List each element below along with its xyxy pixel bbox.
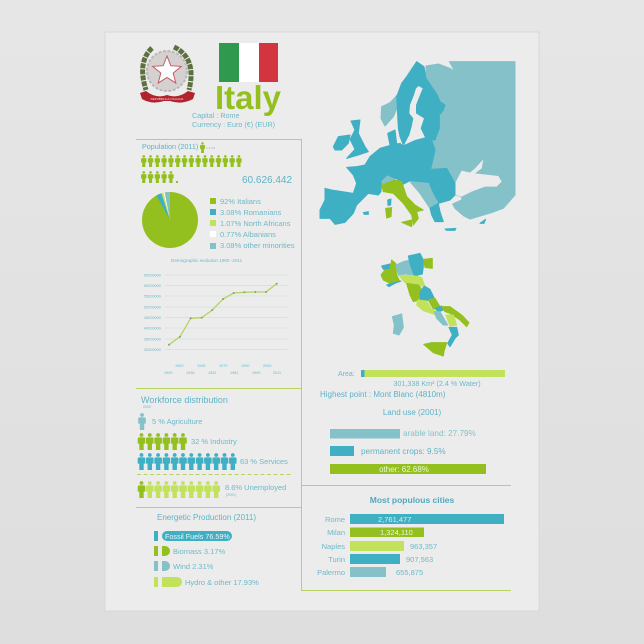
icon: Italian flag bbox=[219, 43, 278, 82]
icon: coat of arms bbox=[140, 47, 195, 103]
Sweden, Finland and Baltic states bbox=[397, 62, 445, 145]
Greece bbox=[430, 203, 443, 222]
area bar bbox=[361, 370, 505, 377]
line chart: demographic evolution: 2000 bbox=[263, 364, 271, 368]
line chart: demographic evolution: 1990 bbox=[252, 371, 260, 375]
Lombardy bbox=[396, 260, 414, 275]
Calabria bbox=[448, 327, 458, 347]
city: Rome: Rome bbox=[325, 515, 345, 524]
cities heading: Most populous cities bbox=[370, 495, 455, 505]
line chart: demographic evolution: 55000000 bbox=[144, 294, 161, 298]
population heading: Population (2011) bbox=[142, 142, 198, 151]
icon: coat of arms: REPUBBLICA ITALIANA bbox=[151, 97, 183, 101]
Switzerland bbox=[382, 176, 395, 185]
Umbria and Marche bbox=[420, 286, 434, 301]
line chart: demographic evolution: 50000000 bbox=[144, 306, 161, 310]
line chart: demographic evolution bbox=[144, 258, 287, 375]
city: Palermo: Palermo bbox=[317, 568, 345, 577]
line chart: demographic evolution: 1936 bbox=[186, 371, 194, 375]
Basilicata bbox=[446, 315, 457, 326]
panel frame lines bbox=[136, 140, 511, 590]
line chart: demographic evolution: 60000000 bbox=[144, 284, 161, 288]
Aosta bbox=[382, 264, 390, 269]
energy heading: Energetic Production (2011) bbox=[157, 513, 256, 522]
Norway bbox=[381, 95, 398, 126]
pie legend: 3.08% Romanians bbox=[220, 208, 282, 217]
population legend icon: = 3 mil bbox=[206, 146, 215, 150]
Russia and eastern neighbours bbox=[432, 62, 515, 219]
line chart: demographic evolution: 1900 bbox=[164, 371, 172, 375]
industry row bbox=[138, 433, 237, 450]
capital and currency: Currency : Euro (€) (EUR) bbox=[192, 120, 275, 129]
pie legend: 92% Italians bbox=[220, 197, 261, 206]
pie legend: 1.07% North Africans bbox=[220, 219, 291, 228]
panel: population bbox=[141, 142, 295, 375]
Tuscany bbox=[407, 283, 421, 302]
pie legend: 3.08% other minorities bbox=[220, 241, 295, 250]
city: Rome: 2,761,477 bbox=[378, 515, 411, 524]
line chart: demographic evolution: Demographic evolution 1900 -2011 bbox=[171, 258, 243, 263]
Ireland bbox=[333, 135, 350, 150]
northern pale area bbox=[426, 64, 455, 107]
city: Milan: 1,324,110 bbox=[380, 528, 413, 537]
wind bar: Wind 2.31% bbox=[173, 562, 214, 571]
biomass bar: Biomass 3.17% bbox=[173, 547, 225, 556]
Sardinia bbox=[392, 314, 403, 335]
area value: 301,338 Km² (2.4 % Water) bbox=[393, 379, 481, 388]
Sardinia bbox=[386, 208, 392, 218]
services row bbox=[138, 453, 288, 470]
population total: 60.626.442 bbox=[242, 175, 292, 186]
land use: other bbox=[330, 464, 486, 474]
land use: permanent crops: permanent crops: 9.5% bbox=[361, 447, 446, 456]
line chart: demographic evolution: 1951 bbox=[208, 371, 216, 375]
city: Milan bbox=[327, 528, 424, 537]
map: Italian regions bbox=[381, 253, 469, 356]
fossil fuels bar: Fossil Fuels 76.59% bbox=[165, 532, 230, 541]
line chart: demographic evolution: 30000000 bbox=[144, 348, 161, 352]
Abruzzo bbox=[428, 298, 440, 309]
land use: permanent crops bbox=[330, 446, 446, 456]
Great Britain bbox=[347, 120, 368, 158]
Campania bbox=[434, 312, 448, 325]
city: Milan: Milan bbox=[327, 528, 345, 537]
continental Europe bbox=[320, 139, 455, 224]
city: Turin: 907,563 bbox=[406, 555, 433, 564]
unemployed row bbox=[138, 481, 286, 498]
area label: Area: bbox=[338, 371, 355, 378]
Sicily bbox=[402, 220, 412, 227]
Denmark bbox=[388, 130, 397, 145]
Emilia-Romagna bbox=[399, 275, 425, 287]
city: Palermo bbox=[317, 567, 423, 577]
Black Sea bbox=[455, 159, 502, 197]
Piedmont bbox=[381, 260, 400, 283]
city: Turin: Turin bbox=[328, 555, 345, 564]
population legend icon bbox=[200, 142, 215, 153]
Baltic Sea bbox=[404, 86, 425, 145]
land use: other: other: 62.68% bbox=[379, 465, 429, 474]
population icons row 2 bbox=[141, 171, 178, 183]
Sicily bbox=[424, 343, 447, 356]
line chart: demographic evolution: 45000000 bbox=[144, 316, 161, 320]
Veneto and Trentino bbox=[408, 253, 423, 276]
line chart: demographic evolution: 1981 bbox=[230, 371, 238, 375]
capital and currency: Capital : Rome bbox=[192, 111, 240, 120]
agriculture row bbox=[138, 413, 202, 430]
Lazio bbox=[417, 300, 443, 319]
city: Naples: 963,357 bbox=[410, 542, 437, 551]
city: Naples: Naples bbox=[322, 542, 345, 551]
land use: arable bbox=[330, 429, 476, 438]
city: Palermo: 655,875 bbox=[396, 568, 423, 577]
pie chart bbox=[142, 192, 198, 248]
map: Europe bbox=[320, 62, 515, 230]
pie legend: 0.77% Albanians bbox=[220, 230, 276, 239]
agriculture row: 5 % Agriculture bbox=[152, 417, 202, 426]
panel: geography facts bbox=[320, 370, 505, 474]
pie legend bbox=[210, 197, 295, 250]
Corsica bbox=[388, 199, 391, 205]
line chart: demographic evolution: 65000000 bbox=[144, 274, 161, 278]
population icons row 1 bbox=[141, 155, 242, 167]
Balkans bbox=[410, 182, 438, 208]
line chart: demographic evolution: 1920 bbox=[175, 364, 183, 368]
Molise bbox=[435, 306, 443, 312]
line chart: demographic evolution: 40000000 bbox=[144, 326, 161, 330]
city: Rome bbox=[325, 514, 504, 524]
title: Italy bbox=[215, 79, 282, 116]
line chart: demographic evolution: 1970 bbox=[219, 364, 227, 368]
services row: 63 % Services bbox=[240, 457, 288, 466]
Friuli bbox=[423, 258, 432, 268]
land use: arable: arable land: 27.79% bbox=[403, 429, 476, 438]
city: Turin bbox=[328, 554, 433, 564]
Apulia bbox=[442, 307, 469, 327]
line chart: demographic evolution: 1945 bbox=[197, 364, 205, 368]
line chart: demographic evolution: 1990 bbox=[241, 364, 249, 368]
line chart: demographic evolution: 2011 bbox=[273, 371, 281, 375]
city: Naples bbox=[322, 541, 437, 551]
workforce heading: Workforce distribution bbox=[141, 395, 228, 405]
hydro bar: Hydro & other 17.93% bbox=[185, 578, 259, 587]
capital and currency bbox=[192, 111, 275, 129]
unemployed row: 8.6% Unemployed bbox=[225, 483, 286, 492]
workforce year: 2009 bbox=[143, 405, 151, 409]
poster sheet bbox=[105, 32, 539, 611]
line chart: demographic evolution: 35000000 bbox=[144, 338, 161, 342]
land use heading: Land use (2001) bbox=[383, 408, 441, 417]
Italy highlighted bbox=[382, 180, 423, 225]
unemployed row: (2001) bbox=[226, 493, 236, 497]
panel: workforce distribution bbox=[138, 395, 288, 498]
industry row: 32 % Industry bbox=[191, 437, 237, 446]
highest point: Highest point : Mont Blanc (4810m) bbox=[320, 390, 446, 399]
panel: most populous cities bbox=[317, 495, 504, 577]
panel: energetic production bbox=[154, 513, 259, 587]
Balearic, Crete and Cyprus bbox=[363, 212, 486, 230]
Liguria bbox=[387, 281, 401, 287]
